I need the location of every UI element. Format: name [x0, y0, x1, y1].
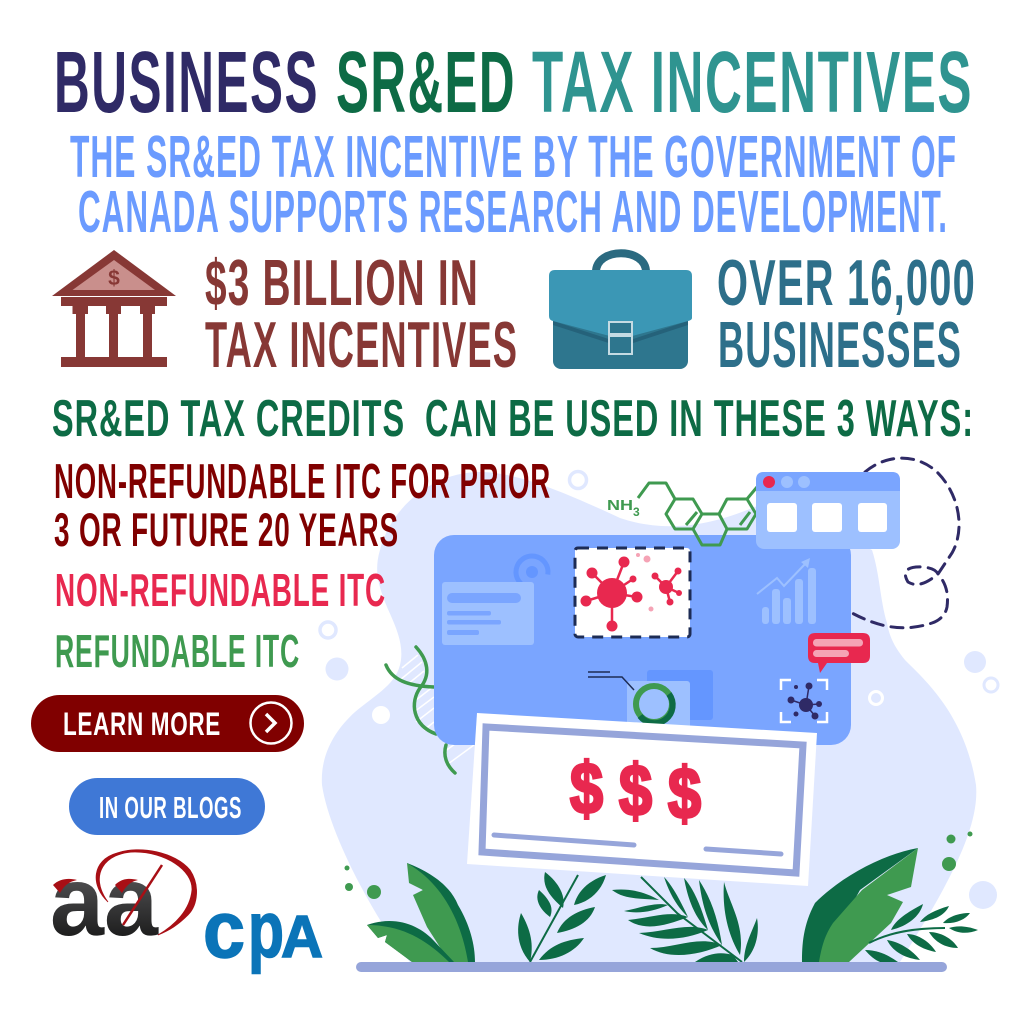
button: learn more: LEARN MORE [63, 706, 221, 742]
title: BUSINESS [54, 34, 319, 131]
ground bar [356, 962, 947, 972]
leaf: right sprig [865, 904, 978, 962]
scan icon [781, 680, 827, 722]
main panel [434, 535, 851, 745]
background blob [322, 472, 976, 962]
stat: 3 billion in tax incentives: TAX INCENTIVES [205, 308, 518, 381]
cheque: $ [619, 751, 652, 831]
list: ways to use credits: 3 OR FUTURE 20 YEARS [54, 503, 399, 556]
virus card [575, 548, 690, 637]
green dots [344, 832, 972, 899]
list: ways to use credits: NON-REFUNDABLE ITC [55, 564, 386, 616]
molecule: NH [607, 497, 633, 514]
molecule [607, 483, 757, 545]
text card with donut [442, 553, 551, 645]
icon: bank [52, 250, 176, 367]
leaf: palm frond [612, 877, 758, 962]
logo: cpa: A [281, 904, 323, 970]
logo: cpa: p [248, 885, 284, 974]
stat: 3 billion in tax incentives [205, 246, 518, 381]
logo: cpa: c [203, 885, 245, 974]
list: ways to use credits [54, 455, 551, 677]
logo: cpa [203, 885, 323, 974]
ring chart [588, 670, 713, 731]
illustration [320, 458, 998, 972]
stat: over 16,000 businesses [717, 246, 976, 381]
title [54, 34, 973, 131]
list: ways to use credits: REFUNDABLE ITC [55, 625, 300, 677]
leaf: right large [802, 848, 918, 962]
leaf: centre fern [518, 872, 606, 962]
logo: aa: aa [50, 846, 159, 956]
button: in our blogs: IN OUR BLOGS [99, 790, 242, 825]
stat: 3 billion in tax incentives: $3 BILLION IN [205, 246, 479, 319]
dashed connector [852, 458, 959, 628]
cheque: $ [668, 754, 701, 834]
button: learn more [31, 695, 304, 752]
cheque: $ [570, 749, 603, 829]
list: ways to use credits: NON-REFUNDABLE ITC FOR PRIOR [54, 455, 551, 509]
browser window [756, 472, 900, 549]
icon: briefcase [549, 253, 692, 369]
bar chart [757, 558, 816, 624]
leaf: left large [367, 863, 475, 962]
cheque [467, 713, 817, 886]
title: SR&ED [336, 34, 516, 131]
vine with hatching [386, 647, 474, 773]
molecule: 3 [633, 505, 640, 519]
icon: bank: $ [108, 267, 120, 290]
decorative circles [320, 472, 998, 909]
speech bubble [808, 633, 870, 673]
button: in our blogs [69, 778, 265, 835]
subtitle [70, 124, 957, 245]
